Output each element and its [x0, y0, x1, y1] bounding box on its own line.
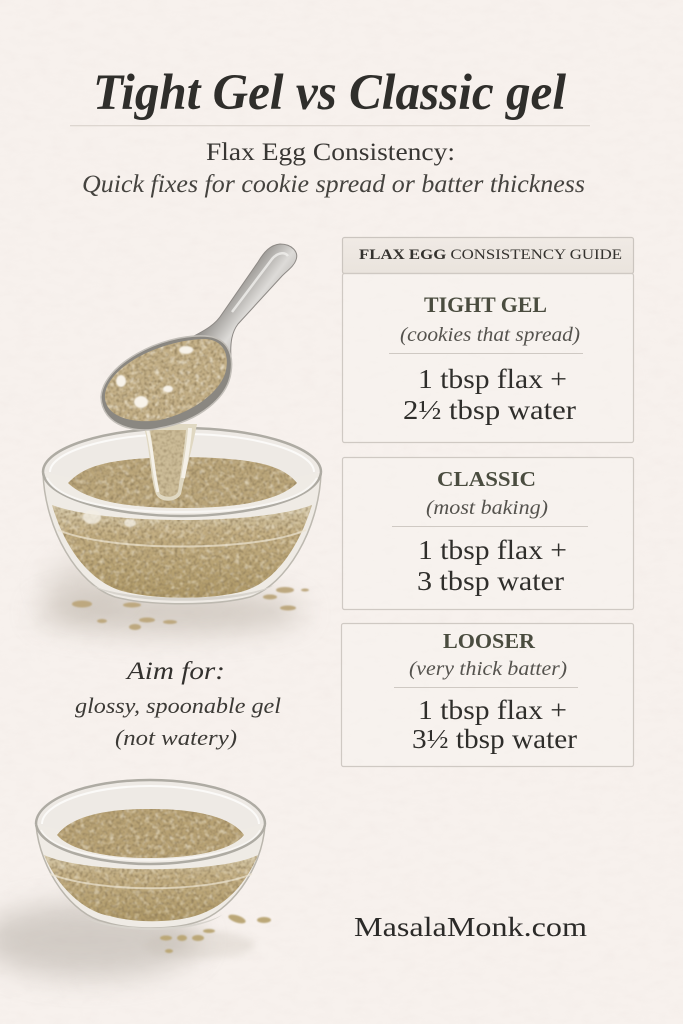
website credit: MasalaMonk.com	[354, 912, 587, 942]
card: looser: LOOSER	[443, 629, 536, 653]
guide header	[342, 238, 634, 274]
gel drip from spoon	[143, 424, 197, 501]
subtitle tagline: Quick fixes for cookie spread or batter thickness	[82, 171, 585, 198]
card: tight gel: (cookies that spread)	[400, 325, 580, 346]
card: classic: 3 tbsp water	[417, 566, 564, 596]
card: looser	[342, 624, 634, 766]
bowl rim and gel surface	[43, 428, 321, 516]
card: tight gel: 2½ tbsp water	[403, 395, 576, 425]
panel: consistency guide	[342, 238, 634, 766]
small bowl body	[36, 825, 265, 930]
callout: aim for: glossy, spoonable gel	[75, 693, 281, 718]
callout: aim for	[75, 658, 281, 750]
card: looser: 1 tbsp flax +	[418, 695, 567, 725]
card: classic: (most baking)	[426, 498, 548, 519]
spoon	[101, 244, 297, 430]
card: looser: 3½ tbsp water	[412, 724, 577, 754]
card: tight gel: TIGHT GEL	[424, 292, 547, 317]
illustration: large glass bowl with flax gel and spoon	[35, 244, 321, 634]
card: looser: (very thick batter)	[409, 659, 567, 680]
card: classic	[342, 458, 634, 610]
callout: aim for: (not watery)	[115, 725, 237, 750]
small bowl rim and gel surface	[36, 780, 265, 864]
card: tight gel: 1 tbsp flax +	[418, 364, 567, 394]
bowl body	[43, 473, 321, 604]
title: Tight Gel vs Classic gel	[93, 65, 567, 121]
shadow and scattered flax under large bowl	[35, 557, 309, 634]
subtitle heading: Flax Egg Consistency:	[206, 137, 455, 166]
callout: aim for: Aim for:	[125, 658, 225, 685]
card: tight gel	[342, 274, 634, 442]
card: classic: CLASSIC	[437, 467, 536, 491]
shadow and scattered seeds under small bowl	[0, 902, 271, 978]
illustration: small glass bowl	[0, 780, 271, 978]
guide header: FLAX EGG CONSISTENCY GUIDE	[359, 247, 622, 263]
card: classic: 1 tbsp flax +	[418, 535, 567, 565]
